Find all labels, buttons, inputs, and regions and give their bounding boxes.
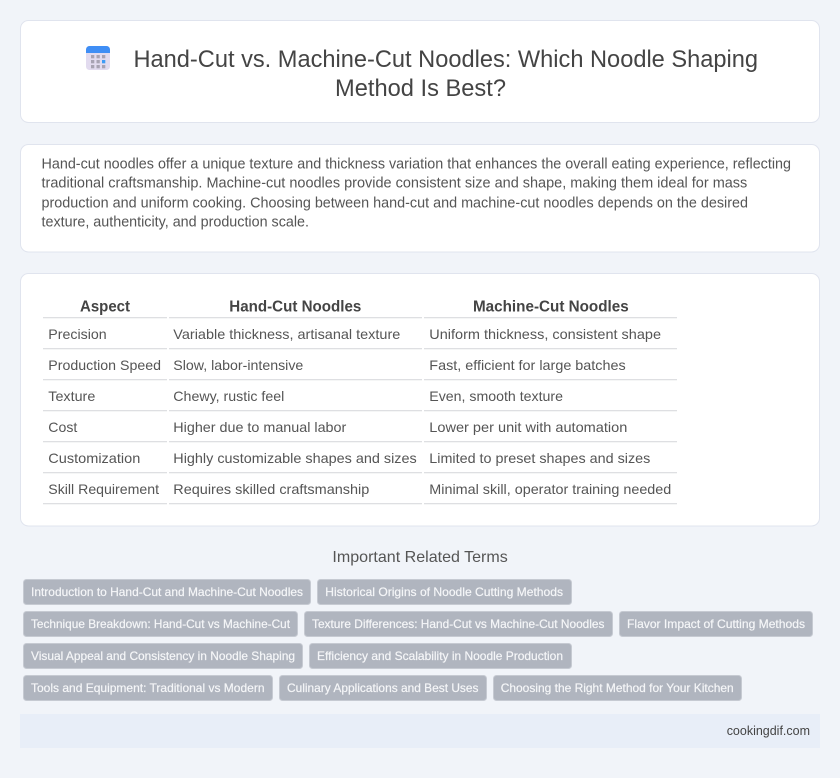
tag (24, 644, 302, 668)
text block: introduction paragraph: texture, authenticity, and production scale. (42, 215, 309, 231)
table row: customization: Limited to preset shapes and sizes (429, 450, 650, 466)
tag: Visual Appeal and Consistency in Noodle Shaping (31, 649, 295, 663)
table row: cost: Higher due to manual labor (173, 419, 347, 435)
table row: customization (43, 450, 677, 473)
table row: skill requirement (43, 481, 677, 504)
panel: comparison table (20, 274, 820, 526)
table row: texture (43, 388, 677, 411)
table row: precision: Precision (48, 326, 107, 342)
table header row: Machine-Cut Noodles (473, 299, 629, 316)
title: Hand-Cut vs. Machine-Cut Noodles: Which Noodle Shaping (134, 46, 758, 73)
tag (620, 612, 812, 636)
tag (318, 580, 572, 604)
table header row: Hand-Cut Noodles (229, 299, 361, 316)
tag: Efficiency and Scalability in Noodle Production (317, 649, 563, 663)
heading: important related terms: Important Related Terms (332, 549, 508, 566)
text block: introduction paragraph: production and uniform cooking. Choosing between hand-cut and machine-cut noodles depends on the desired (42, 195, 748, 211)
tag: Historical Origins of Noodle Cutting Methods (325, 585, 563, 599)
title: Method Is Best? (335, 75, 506, 102)
table row: production speed: Slow, labor-intensive (173, 357, 304, 373)
panel: related term tags (24, 580, 812, 700)
footer (20, 714, 820, 748)
table row: texture: Texture (48, 388, 96, 404)
tag (24, 612, 298, 636)
table row: skill requirement: Minimal skill, operator training needed (429, 481, 671, 497)
table row: precision: Uniform thickness, consistent shape (429, 326, 661, 342)
panel: header (20, 20, 820, 122)
tag (24, 676, 272, 700)
tag: Technique Breakdown: Hand-Cut vs Machine-Cut (31, 617, 291, 631)
table row: precision (43, 326, 677, 349)
table row: customization: Customization (48, 450, 140, 466)
text block: introduction paragraph: Hand-cut noodles offer a unique texture and thickness variation that enhances the overall eating experience, reflecting (42, 156, 791, 172)
table row: customization: Highly customizable shapes and sizes (173, 450, 417, 466)
tag (310, 644, 572, 668)
table row: production speed: Production Speed (48, 357, 161, 373)
table row: cost: Lower per unit with automation (429, 419, 627, 435)
tag: Texture Differences: Hand-Cut vs Machine-Cut Noodles (312, 617, 604, 631)
icon: calendar grid (86, 46, 110, 70)
text block: introduction paragraph: traditional craftsmanship. Machine-cut noodles provide consistent size and shape, making them ideal for mass (42, 176, 747, 192)
tag: Culinary Applications and Best Uses (287, 681, 478, 695)
tag: Tools and Equipment: Traditional vs Modern (31, 681, 264, 695)
table row: texture: Even, smooth texture (429, 388, 563, 404)
table row: production speed (43, 357, 677, 380)
table row: skill requirement: Requires skilled craftsmanship (173, 481, 370, 497)
table row: precision: Variable thickness, artisanal texture (173, 326, 401, 342)
table row: cost (43, 419, 677, 442)
tag (494, 676, 742, 700)
table row: texture: Chewy, rustic feel (173, 388, 284, 404)
table row: production speed: Fast, efficient for large batches (429, 357, 626, 373)
tag (304, 612, 612, 636)
tag (24, 580, 310, 604)
tag: Introduction to Hand-Cut and Machine-Cut Noodles (31, 585, 303, 599)
table row: cost: Cost (48, 419, 77, 435)
tag (280, 676, 486, 700)
text block: introduction paragraph (42, 156, 791, 231)
footer: cookingdif.com (727, 724, 810, 738)
table row: skill requirement: Skill Requirement (48, 481, 159, 497)
panel: introduction (20, 144, 820, 252)
tag: Choosing the Right Method for Your Kitchen (501, 681, 734, 695)
table header row: Aspect (80, 299, 131, 316)
title (134, 46, 758, 102)
tag: Flavor Impact of Cutting Methods (627, 617, 805, 631)
table header row (43, 299, 677, 318)
